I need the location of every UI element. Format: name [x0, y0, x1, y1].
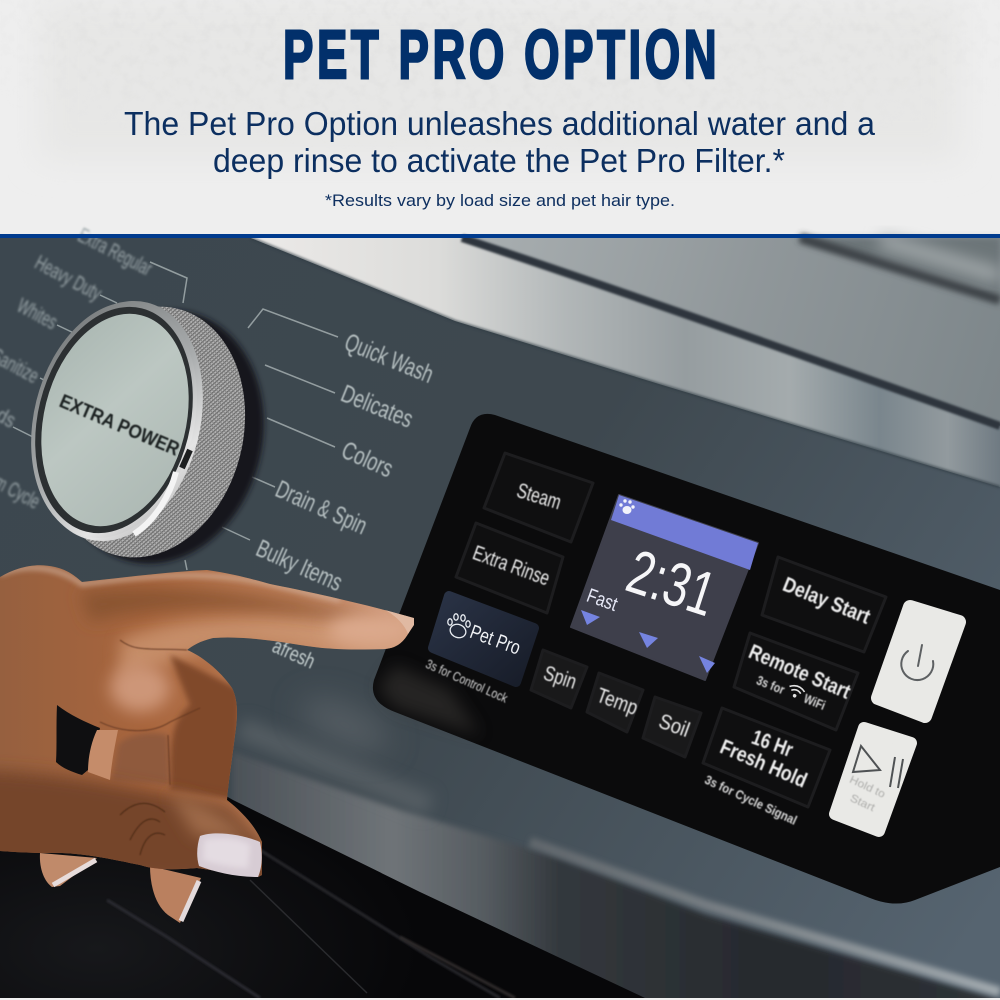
display status band	[611, 495, 758, 570]
hold to start: Start	[848, 792, 877, 814]
hold to start	[848, 774, 887, 814]
key labels: Remote Start	[745, 640, 854, 704]
lower fingertips	[40, 853, 201, 923]
knuckle creases	[100, 640, 200, 785]
footnote: *Results vary by load size and pet hair type.	[325, 191, 675, 210]
hand pressing pet pro	[0, 565, 420, 923]
key sublabels: 3s for	[754, 672, 787, 697]
washer lid	[462, 238, 1000, 424]
display fast label: Fast	[584, 585, 621, 616]
icon: power	[901, 645, 933, 680]
chrome rim	[7, 284, 221, 556]
header rule	[0, 234, 1000, 238]
icon: display paw	[619, 499, 635, 514]
left blurred labels: Heavy Duty	[31, 251, 106, 305]
index nail	[385, 610, 414, 634]
selector dial	[7, 283, 290, 586]
top right lid groove	[795, 238, 1000, 300]
right labels: Delicates	[337, 380, 417, 434]
hold to start: Hold to	[848, 774, 887, 801]
dial label: EXTRA POWER	[56, 391, 182, 461]
start button	[835, 728, 911, 831]
icon: wifi	[787, 684, 806, 699]
dial shadow	[30, 288, 290, 586]
key sublabels	[424, 656, 828, 828]
icon: paw	[448, 614, 470, 640]
panel reflection	[294, 688, 396, 762]
subtitle	[124, 106, 875, 180]
right labels: Quick Wash	[341, 328, 437, 389]
bottom edge	[0, 998, 1000, 1000]
key labels: Spin	[541, 662, 579, 694]
key labels: Steam	[514, 479, 564, 514]
curled finger dark	[170, 655, 240, 800]
thumb creases	[120, 803, 165, 855]
key: pet pro	[433, 596, 534, 682]
right labels: afresh	[269, 635, 318, 674]
display arrows	[581, 610, 715, 673]
finger underside light	[120, 619, 420, 680]
cycle labels	[0, 224, 437, 674]
key outlines	[456, 453, 886, 807]
finger top tone	[80, 588, 400, 624]
subtitle: The Pet Pro Option unleashes additional water and a	[124, 106, 875, 143]
washer photo scene	[0, 238, 1000, 1000]
curled finger light	[110, 664, 170, 712]
ridge highlight	[240, 728, 1000, 992]
dial face	[20, 298, 210, 542]
key labels: Temp	[594, 684, 641, 720]
key sublabels: 3s for Control Lock	[424, 656, 510, 706]
right labels: Drain & Spin	[271, 475, 371, 540]
knurled body	[23, 286, 271, 578]
chrome band	[9, 283, 227, 559]
key labels: Delay Start	[779, 573, 873, 629]
panel body	[373, 414, 1000, 904]
display time: 2:31	[619, 537, 724, 630]
right labels	[252, 328, 437, 674]
icon: play pause	[853, 746, 903, 788]
right labels: Bulky Items	[252, 534, 347, 597]
key labels: Soil	[656, 710, 693, 742]
control panel	[373, 414, 1000, 904]
lower cabinet wedge	[233, 752, 1000, 1000]
left blurred labels: Extra Regular	[74, 224, 156, 281]
finger gap	[56, 705, 100, 775]
key labels: Fresh Hold	[717, 735, 810, 793]
display screen	[571, 495, 758, 680]
cycle leader lines	[13, 262, 338, 570]
power button	[878, 607, 959, 716]
subtitle: deep rinse to activate the Pet Pro Filter.*	[213, 143, 785, 180]
header panel	[38, 0, 962, 210]
finger top highlight	[0, 568, 340, 600]
left blurred labels: Whites	[13, 294, 61, 334]
hand shading	[0, 568, 420, 890]
base details	[107, 850, 515, 998]
hand body	[0, 565, 414, 877]
dark base	[0, 668, 645, 998]
curled fingertip	[88, 730, 118, 780]
key: pet pro: Pet Pro	[467, 621, 523, 660]
key sublabels: WiFi	[802, 691, 828, 713]
rim highlights	[134, 450, 190, 534]
title: PET PRO OPTION	[283, 17, 717, 93]
key labels: 16 Hr	[749, 726, 796, 762]
key labels: Extra Rinse	[470, 541, 553, 590]
reflective band	[251, 238, 1000, 487]
thumb nail	[197, 833, 262, 877]
thumb tone	[0, 770, 270, 890]
left blurred labels	[0, 224, 156, 514]
lid groove	[462, 238, 1000, 426]
key labels	[470, 479, 873, 793]
fingertip pink	[328, 614, 412, 646]
right labels: Colors	[337, 436, 397, 483]
panel reflection	[378, 665, 480, 735]
key sublabels: 3s for Cycle Signal	[702, 772, 799, 828]
